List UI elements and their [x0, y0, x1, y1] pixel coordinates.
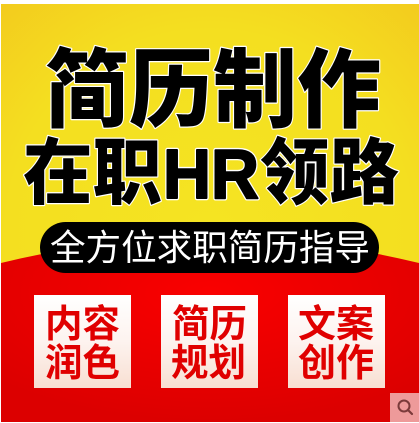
subtitle: 在职HR领路: 领路 — [260, 134, 399, 214]
icon: search — [390, 393, 419, 422]
card: 文案创作: 创作 — [298, 343, 374, 385]
pill text: 全方位求职简历指导 — [50, 227, 370, 268]
subtitle: 在职HR领路 — [23, 134, 399, 214]
subtitle: 在职HR领路: HR — [163, 135, 259, 213]
title: 简历制作: 简历制作 — [45, 43, 381, 139]
card: 内容润色: 润色 — [45, 343, 120, 385]
card: 文案创作 — [288, 295, 385, 388]
card: 文案创作: 文案 — [298, 304, 374, 346]
red curved background — [1, 238, 419, 422]
subtitle: 在职HR领路: 在职 — [23, 134, 162, 214]
card: 内容润色: 内容 — [45, 304, 120, 346]
subtitle: 在职HR领路: HR — [163, 135, 259, 213]
pill banner — [40, 222, 379, 273]
card: 简历规划 — [161, 295, 258, 388]
card: 内容润色 — [34, 295, 131, 388]
card: 简历规划: 规划 — [171, 343, 246, 385]
card: 简历规划: 简历 — [172, 304, 247, 346]
